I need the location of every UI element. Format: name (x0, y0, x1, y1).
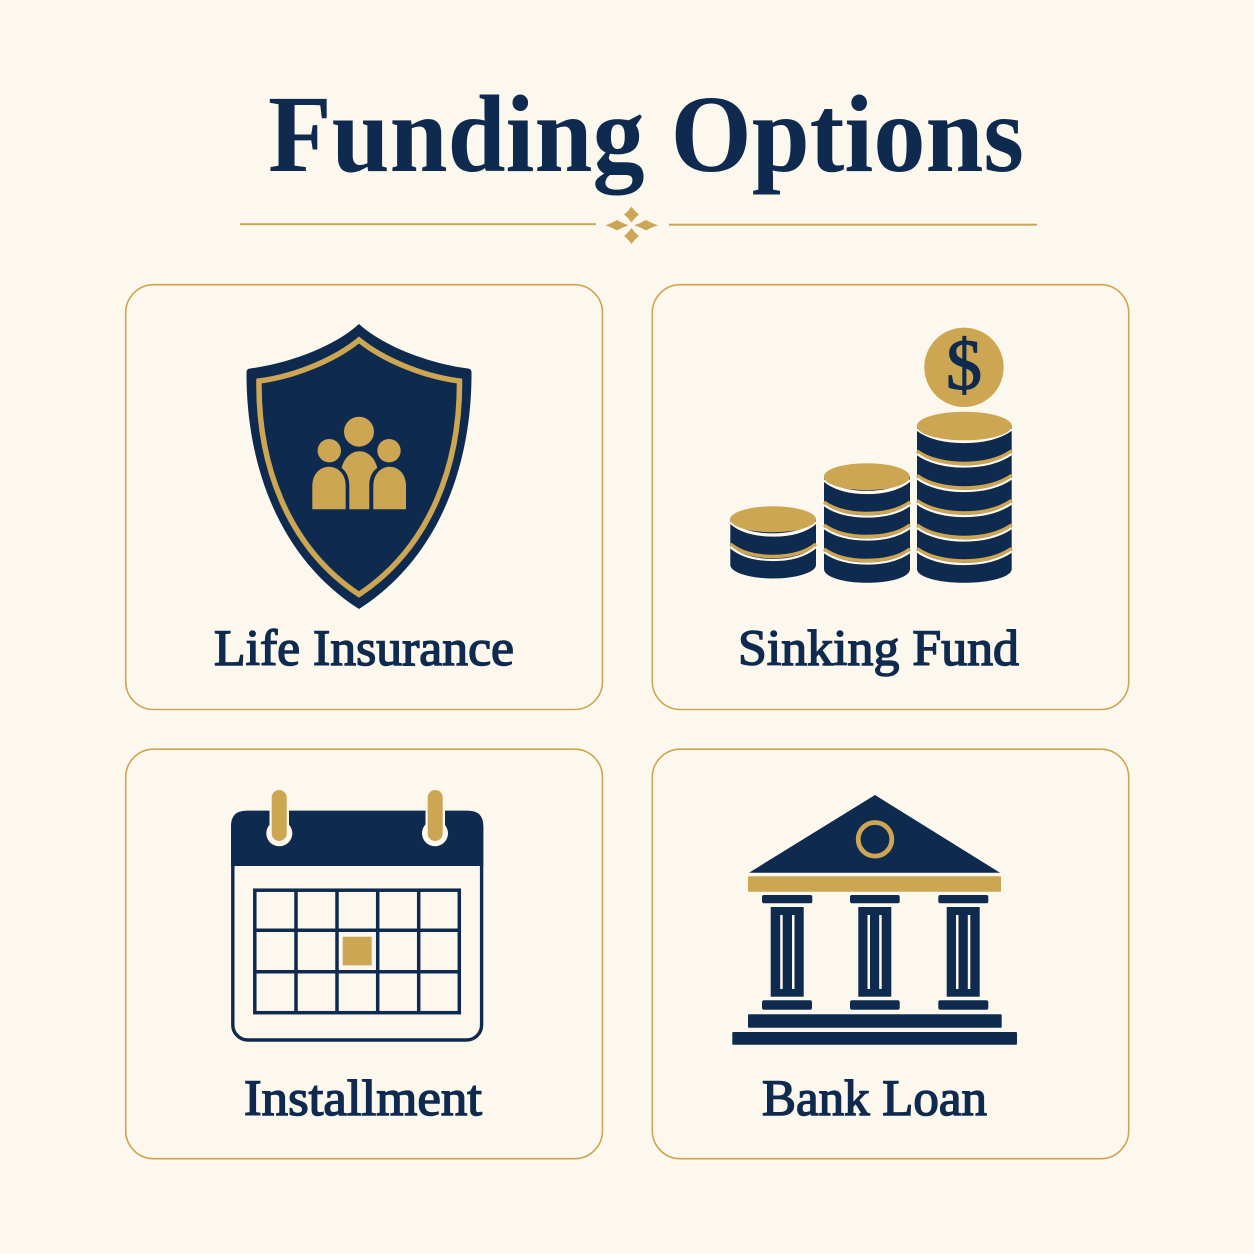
panel: sinking fund (652, 285, 1129, 710)
label: bank loan: Bank Loan (762, 1071, 987, 1127)
medium stack (824, 463, 910, 583)
panel: installment (126, 749, 602, 1159)
title divider ornament (240, 206, 1037, 244)
icon: dollar coin: $ (946, 325, 982, 405)
icon: calendar (231, 790, 483, 1040)
title: Funding Options (268, 73, 1024, 195)
panel: life insurance (126, 285, 602, 710)
icon: shield with family (246, 324, 472, 609)
icon: coin stacks (730, 325, 1012, 583)
short stack (730, 506, 816, 578)
panel: bank loan (652, 749, 1129, 1159)
tall stack (917, 412, 1012, 583)
icon: dollar coin (924, 325, 1004, 407)
label: installment: Installment (244, 1071, 482, 1127)
label: life insurance: Life Insurance (214, 621, 514, 677)
label: sinking fund: Sinking Fund (738, 621, 1019, 677)
highlighted day (343, 937, 372, 965)
calendar grid (255, 890, 459, 1013)
icon: bank building (732, 795, 1017, 1045)
